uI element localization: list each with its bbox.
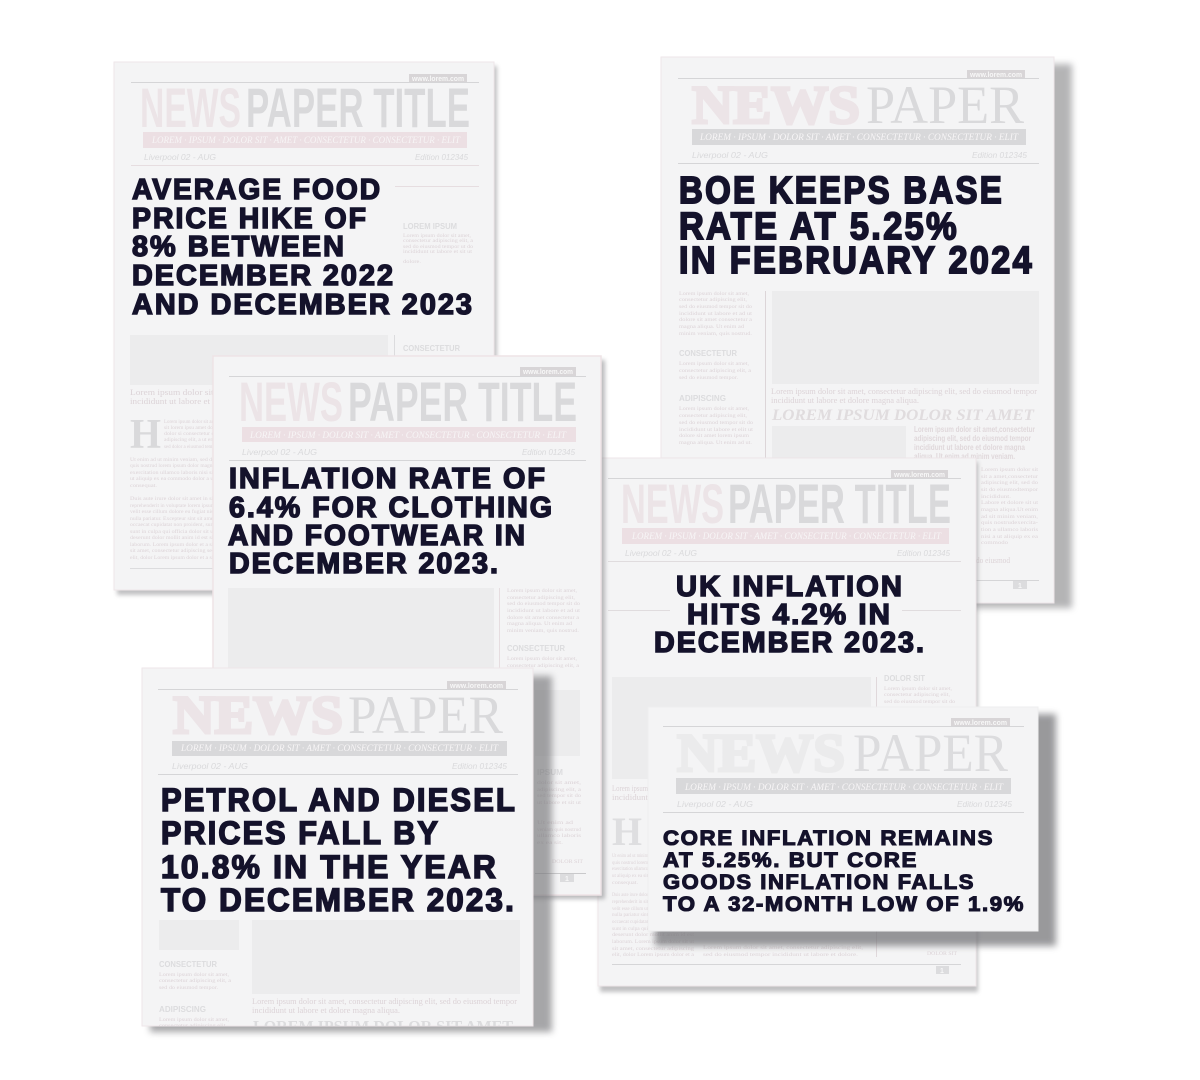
sidebar: lorem ipsum: dolore. bbox=[403, 259, 422, 265]
drop cap and article text: sit amet, consectetur adipiscing sed bbox=[130, 548, 215, 554]
headline: UK inflation: UK INFLATION bbox=[676, 571, 904, 603]
drop cap and article text: Lorem ipsum dolor sit amet bbox=[164, 419, 219, 425]
masthead: newspaper title bbox=[140, 76, 470, 139]
masthead: newspaper bbox=[173, 685, 503, 745]
headline: clothing and footwear: DECEMBER 2023. bbox=[229, 548, 500, 580]
masthead: newspaper: PAPER bbox=[866, 75, 1024, 135]
masthead: newspaper title: NEWS bbox=[239, 370, 343, 433]
right column: dolore sit amet consectetur a bbox=[507, 615, 580, 621]
panel: newspaper BoE base rate: Edition 012345 bbox=[972, 150, 1027, 160]
headline: UK inflation: HITS 4.2% IN bbox=[687, 599, 892, 631]
drop cap and article text: deserunt dolor mollit anim id est sit bbox=[130, 535, 215, 541]
masthead: newspaper title: PAPER TITLE bbox=[348, 370, 577, 433]
masthead: newspaper: PAPER bbox=[853, 723, 1008, 783]
masthead: newspaper: NEWS bbox=[677, 723, 845, 783]
drop cap and article text: velit esse cillum dolore eu fugiat nisi bbox=[130, 508, 215, 515]
left column: consectetur adipiscing elit, a bbox=[159, 978, 232, 984]
left article text: velit esse cillum ut bbox=[612, 906, 648, 912]
panel: newspaper petrol and diesel bbox=[142, 668, 552, 1036]
masthead: newspaper title: PAPER TITLE bbox=[728, 472, 951, 535]
masthead: newspaper title: PAPER TITLE bbox=[246, 76, 470, 139]
panel: newspaper core inflation: www.lorem.com bbox=[953, 720, 1007, 727]
right column article: incididunt. bbox=[981, 494, 1012, 500]
drop cap and article text: H bbox=[130, 412, 161, 458]
left column: magna aliqua. Ut enim ad ut. bbox=[679, 440, 753, 446]
left column: consectetur adipiscing elit, bbox=[159, 1023, 228, 1029]
left column: Lorem ipsum dolor sit amet, bbox=[159, 1017, 230, 1023]
sidebar: lorem ipsum: consectetur adipiscing elit, a bbox=[403, 238, 474, 244]
left article text: elit, dolor Lorem ipsum dolor et a bbox=[612, 952, 695, 958]
right column article: sit do eiusmodtempor bbox=[981, 487, 1038, 493]
left column: minim veniam, quis nostrud. bbox=[679, 331, 753, 337]
right column article: Labore et dolore sit ut bbox=[981, 500, 1039, 506]
headline: average food price: DECEMBER 2022 bbox=[132, 260, 395, 292]
drop cap and article text: exercitation ullamco laboris nisi sit bbox=[130, 470, 215, 476]
sidebar: lorem ipsum: sed do eiusmod tempor ut do bbox=[403, 244, 473, 250]
right column: sed do eiusmod tempor sit do bbox=[507, 601, 580, 607]
bold article intro: Lorem ipsum dolor sit amet,consectetur bbox=[914, 425, 1035, 434]
drop cap and article text: laborum. Lorem ipsum dolor et a sit bbox=[130, 542, 215, 548]
right column article: commodo bbox=[981, 540, 1008, 546]
panel: newspaper UK inflation: H bbox=[612, 809, 642, 854]
panel: newspaper UK inflation: LOREM · IPSUM · DOLOR SIT · AMET · CONSECTETUR · CONSECTETUR · ELIT bbox=[631, 531, 942, 541]
headline: petrol and diesel bbox=[161, 782, 517, 918]
headline: core inflation: AT 5.25%. BUT CORE bbox=[663, 848, 918, 872]
drop cap and article text: occaecat cupidatat non proident, sunt bbox=[130, 522, 215, 528]
left column bbox=[679, 291, 754, 446]
masthead: newspaper title: NEWS bbox=[140, 76, 241, 139]
left column: sed do eiusmod tempor sit do bbox=[679, 420, 753, 426]
headline: core inflation: CORE INFLATION REMAINS bbox=[663, 826, 994, 850]
masthead: newspaper title bbox=[239, 370, 577, 433]
panel: newspaper clothing and footwear bbox=[213, 356, 605, 899]
panel: newspaper BoE base rate: LOREM IPSUM DOLOR SIT AMET bbox=[771, 407, 1035, 424]
left column: magna aliqua. Ut enim ad bbox=[679, 324, 744, 330]
panel: newspaper clothing and footwear: LOREM · IPSUM · DOLOR SIT · AMET · CONSECTETUR · CONSECTETUR · ELIT bbox=[249, 430, 567, 440]
left article text: Ut enim ad ut minim bbox=[612, 853, 648, 859]
bold article intro: adipiscing elit, sed do eiusmod tempor bbox=[914, 434, 1031, 443]
right column: consectetur adipiscing elit, bbox=[507, 595, 576, 601]
left article text: consequat. bbox=[612, 880, 639, 886]
panel: newspaper core inflation: Liverpool 02 - AUG bbox=[677, 799, 753, 809]
panel: newspaper clothing and footwear: Edition 012345 bbox=[522, 447, 575, 457]
right column article: do eiusmod bbox=[976, 556, 1010, 565]
panel: newspaper food prices bbox=[114, 62, 497, 595]
right column: magna aliqua. Ut enim ad bbox=[507, 621, 572, 627]
headline: clothing and footwear: 6.4% FOR CLOTHING bbox=[229, 492, 554, 524]
sidebar: lorem ipsum: incididunt ut labore et sit ut bbox=[403, 249, 472, 255]
left column: consectetur adipiscing elit, a bbox=[679, 368, 752, 374]
drop cap and article text: quis nostrud lorem ipsum dolor magna bbox=[130, 463, 216, 469]
left article text: occaecat cupidatat bbox=[612, 919, 648, 925]
panel: newspaper BoE base rate: 1 bbox=[1018, 583, 1022, 590]
left article text: quis nostrud lorem bbox=[612, 860, 649, 866]
panel: newspaper UK inflation bbox=[598, 458, 978, 992]
panel: newspaper UK inflation: Liverpool 02 - AUG bbox=[625, 548, 697, 558]
bold article intro: aliqua. Ut enim ad minim veniam. bbox=[914, 452, 1015, 461]
drop cap and article text: adipiscing elit, a ut enim bbox=[164, 437, 220, 443]
sidebar: lorem ipsum bbox=[403, 222, 474, 265]
panel: newspaper food prices: LOREM · IPSUM · DOLOR SIT · AMET · CONSECTETUR · CONSECTETUR · ELIT bbox=[151, 135, 461, 145]
headline: average food price: PRICE HIKE OF bbox=[132, 203, 368, 235]
panel: newspaper petrol and diesel: LOREM · IPSUM · DOLOR SIT · AMET · CONSECTETUR · CONSECTETUR · ELIT bbox=[180, 743, 499, 753]
right column: DOLOR SIT bbox=[884, 674, 925, 683]
right column lower: sed tempor sit do bbox=[537, 793, 581, 799]
panel: newspaper BoE base rate: Liverpool 02 - AUG bbox=[692, 150, 768, 160]
panel: newspaper core inflation: Edition 012345 bbox=[957, 799, 1012, 809]
left article text: exercitation ullamco bbox=[612, 866, 648, 872]
right column: incididunt ut labore et ad ut bbox=[507, 608, 581, 614]
panel: newspaper BoE base rate: incididunt ut labore et dolore magna aliqua. bbox=[771, 396, 919, 405]
masthead: newspaper: NEWS bbox=[692, 75, 860, 135]
drop cap and article text: sunt in culpa qui officia dolor sit ut bbox=[130, 528, 215, 535]
left column: dolore sit amet consectetur a bbox=[679, 317, 753, 323]
drop cap and article text: Duis aute irure dolor sit amet in sit bbox=[130, 496, 215, 502]
masthead: newspaper title: NEWS bbox=[621, 472, 724, 535]
right column: minim veniam, quis nostrud. bbox=[507, 628, 580, 634]
panel: newspaper clothing and footwear: Liverpool 02 - AUG bbox=[242, 447, 317, 457]
right column bbox=[884, 674, 955, 705]
right column lower: ut labore et sit ut bbox=[537, 800, 582, 806]
left article text: sed do eiusmod tempor incididunt ut labore et dolore. bbox=[703, 952, 859, 958]
left article text: nulla pariatur sint bbox=[612, 912, 648, 918]
panel: newspaper BoE base rate bbox=[661, 57, 1072, 608]
masthead: newspaper: PAPER bbox=[348, 685, 503, 745]
left column: consectetur adipiscing elit, bbox=[679, 297, 748, 303]
left column: Lorem ipsum dolor sit amet, bbox=[679, 361, 750, 367]
left column bbox=[159, 960, 232, 1029]
headline: core inflation bbox=[663, 826, 1025, 916]
panel: newspaper food prices: Lorem ipsum dolor sit amet, consectetur adipiscing elit, sed do eiusmod bbox=[130, 388, 400, 397]
panel: newspaper UK inflation: Edition 012345 bbox=[897, 548, 950, 558]
right column lower bbox=[537, 768, 584, 865]
headline: BoE base rate bbox=[679, 170, 1034, 282]
drop cap and article text bbox=[130, 412, 220, 561]
masthead: newspaper: NEWS bbox=[173, 685, 343, 745]
headline: average food price bbox=[132, 174, 474, 321]
panel: newspaper petrol and diesel: Liverpool 02 - AUG bbox=[172, 761, 248, 771]
bold article intro bbox=[914, 425, 1035, 461]
left article text: reprehenderit in sit bbox=[612, 899, 648, 905]
left article text: sit amet, consectetur adipiscing bbox=[612, 946, 694, 952]
right column article: Lorem ipsum dolor sit bbox=[981, 467, 1039, 473]
panel: newspaper food prices: Liverpool 02 - AUG bbox=[144, 152, 216, 162]
right column lower: ullamco laboris bbox=[537, 833, 581, 839]
right column lower: Ut enim ad bbox=[537, 820, 573, 826]
panel: newspaper food prices: www.lorem.com bbox=[411, 76, 464, 83]
right column lower: dolor sit amet, bbox=[537, 780, 582, 786]
drop cap and article text: elit, dolor Lorem ipsum dolor et a sit bbox=[130, 555, 215, 561]
sidebar: lorem ipsum: LOREM IPSUM bbox=[403, 222, 457, 231]
headline: BoE base rate: BOE KEEPS BASE bbox=[679, 170, 1004, 212]
headline: clothing and footwear: AND FOOTWEAR IN bbox=[228, 520, 527, 552]
right column lower: adipiscing elit, a bbox=[537, 787, 582, 793]
left article text: laborum. Lorem ipsum dolor sit ut bbox=[612, 939, 694, 945]
headline: average food price: AVERAGE FOOD bbox=[132, 174, 382, 206]
right column lower: DOLOR SIT bbox=[552, 859, 584, 865]
headline: core inflation: TO A 32-MONTH LOW OF 1.9% bbox=[663, 892, 1025, 916]
headline: average food price: AND DECEMBER 2023 bbox=[132, 289, 474, 321]
left article text: Lorem ipsum dolor sit amet, consectetur adipiscing elit, bbox=[703, 945, 864, 951]
panel: newspaper petrol and diesel: LOREM IPSUM DOLOR SIT AMET bbox=[253, 1017, 514, 1036]
panel: newspaper BoE base rate: www.lorem.com bbox=[969, 72, 1022, 79]
right column: Lorem ipsum dolor sit amet, bbox=[507, 656, 578, 662]
right column: Lorem ipsum dolor sit amet, bbox=[507, 588, 578, 594]
left column: incididunt ut labore et ad ut bbox=[679, 311, 753, 317]
right column article: ad sit minim veniam, bbox=[981, 514, 1039, 520]
right column article: nisi a ut aliquip ex ea bbox=[981, 534, 1039, 540]
left article text: sunt in culpa qui bbox=[612, 926, 648, 932]
panel: newspaper UK inflation: 1 bbox=[940, 968, 944, 975]
right column lower: veniam quis nostrud bbox=[537, 827, 581, 833]
right column: consectetur adipiscing elit, bbox=[884, 692, 951, 698]
panel: newspaper petrol and diesel: www.lorem.com bbox=[449, 683, 503, 690]
headline: petrol and diesel: TO DECEMBER 2023. bbox=[161, 882, 516, 918]
masthead: newspaper title bbox=[621, 472, 951, 535]
headline: petrol and diesel: PRICES FALL BY bbox=[161, 815, 440, 851]
left article text: deserunt dolor mollit anim id est bbox=[612, 932, 694, 938]
left column: Lorem ipsum dolor sit amet, bbox=[679, 406, 750, 412]
panel: newspaper clothing and footwear: 1 bbox=[565, 876, 569, 883]
headline: UK inflation bbox=[654, 571, 926, 659]
right column lower: IPSUM bbox=[537, 768, 563, 777]
left article text: Duis aute irure dolor bbox=[612, 892, 648, 898]
right column: Lorem ipsum dolor sit amet, bbox=[884, 686, 953, 692]
left column: sed do eiusmod tempor. bbox=[159, 985, 219, 991]
drop cap and article text: Ut enim ad ut minim veniam, sed do bbox=[130, 457, 215, 463]
masthead: newspaper bbox=[677, 723, 1008, 783]
panel: newspaper core inflation bbox=[648, 707, 1056, 946]
panel: newspaper BoE base rate: LOREM · IPSUM · DOLOR SIT · AMET · CONSECTETUR · CONSECTETUR · ELIT bbox=[699, 132, 1019, 142]
headline: average food price: 8% BETWEEN bbox=[132, 231, 346, 263]
drop cap and article text: ut aliquip ex ea commodo dolor a ut bbox=[130, 476, 215, 482]
headline: petrol and diesel: PETROL AND DIESEL bbox=[161, 782, 517, 818]
right column bbox=[507, 588, 581, 669]
headline: clothing and footwear: INFLATION RATE OF bbox=[229, 463, 547, 495]
left column: incididunt ut labore et elit ut bbox=[679, 427, 754, 433]
right column: consectetur adipiscing elit, a bbox=[507, 663, 580, 669]
headline: BoE base rate: IN FEBRUARY 2024 bbox=[679, 240, 1034, 282]
left column: sed do eiusmod tempor. bbox=[679, 375, 739, 381]
panel: newspaper BoE base rate: Lorem ipsum dolor sit amet, consectetur adipiscing elit, sed do eiusmod tempor bbox=[771, 387, 1037, 396]
right column article: magna aliqua.Ut enim bbox=[981, 507, 1039, 513]
drop cap and article text: dolor si consectetur elit bbox=[164, 431, 219, 437]
drop cap and article text: reprehenderit in voluptate lorem ipsum bbox=[130, 503, 216, 509]
headline: clothing and footwear bbox=[228, 463, 554, 580]
left column: dolore sit amet lorem ipsum bbox=[679, 433, 750, 439]
left column: consectetur adipiscing elit, bbox=[679, 413, 748, 419]
panel: newspaper food prices: Edition 012345 bbox=[415, 152, 468, 162]
right column article: quis nostrudexercita- bbox=[981, 520, 1038, 526]
left column: ADIPISCING bbox=[159, 1005, 206, 1014]
right column article: sit a amet,consectetur bbox=[981, 474, 1038, 480]
panel: newspaper petrol and diesel: incididunt ut labore et dolore magna aliqua. bbox=[252, 1006, 400, 1015]
drop cap and article text: consequat. bbox=[130, 483, 158, 489]
headline: core inflation: GOODS INFLATION FALLS bbox=[663, 870, 975, 894]
drop cap and article text: nulla pariatur. Excepteur sint sit amet bbox=[130, 516, 215, 522]
right column article: tion a ullamco laboris bbox=[981, 527, 1038, 533]
masthead: newspaper bbox=[692, 75, 1024, 135]
left article text: DOLOR SIT bbox=[927, 951, 958, 957]
panel: newspaper core inflation: LOREM · IPSUM · DOLOR SIT · AMET · CONSECTETUR · CONSECTETUR · ELIT bbox=[684, 782, 1004, 792]
left column: ADIPISCING bbox=[679, 394, 726, 403]
panel: newspaper petrol and diesel: Lorem ipsum dolor sit amet, consectetur adipiscing elit, sed do eiusmod tempor bbox=[252, 997, 517, 1006]
right column article: adipiscing elit, sed do bbox=[981, 480, 1038, 486]
panel: newspaper food prices: CONSECTETUR bbox=[403, 344, 460, 353]
drop cap and article text: sit lorem ipsu amet dolor bbox=[164, 425, 219, 431]
bold article intro: incididunt ut labore et dolore magna bbox=[914, 443, 1025, 452]
left column: sed do eiusmod tempor sit do bbox=[679, 304, 752, 310]
right column article bbox=[976, 467, 1039, 565]
panel: newspaper UK inflation: incididunt bbox=[612, 793, 649, 802]
right column: sed do eiusmod tempor sit do bbox=[884, 699, 955, 705]
left article text: ut aliquip ex ea sit bbox=[612, 873, 648, 879]
sidebar: lorem ipsum: Lorem ipsum dolor sit amet, bbox=[403, 233, 472, 239]
panel: newspaper UK inflation: www.lorem.com bbox=[893, 472, 945, 479]
left column: CONSECTETUR bbox=[159, 960, 217, 969]
left column: Lorem ipsum dolor sit amet, bbox=[159, 972, 230, 978]
panel: newspaper petrol and diesel: Edition 012345 bbox=[452, 761, 507, 771]
headline: BoE base rate: RATE AT 5.25% bbox=[679, 206, 959, 248]
drop cap and article text: sed dolor a eiusmod tempor bbox=[164, 444, 219, 450]
panel: newspaper clothing and footwear: www.lorem.com bbox=[522, 369, 573, 376]
left article text bbox=[612, 853, 958, 958]
right column lower: ex ea sit. bbox=[537, 840, 564, 846]
panel: newspaper food prices: incididunt ut labore et dolore magna aliqua sed do eiusmod tempor magna bbox=[130, 397, 401, 406]
headline: UK inflation: DECEMBER 2023. bbox=[654, 627, 926, 659]
panel: newspaper UK inflation: Lorem ipsum bbox=[612, 784, 649, 793]
left column: CONSECTETUR bbox=[679, 349, 737, 358]
left column: Lorem ipsum dolor sit amet, bbox=[679, 291, 750, 297]
right column: CONSECTETUR bbox=[507, 644, 565, 653]
headline: petrol and diesel: 10.8% IN THE YEAR bbox=[161, 849, 498, 885]
